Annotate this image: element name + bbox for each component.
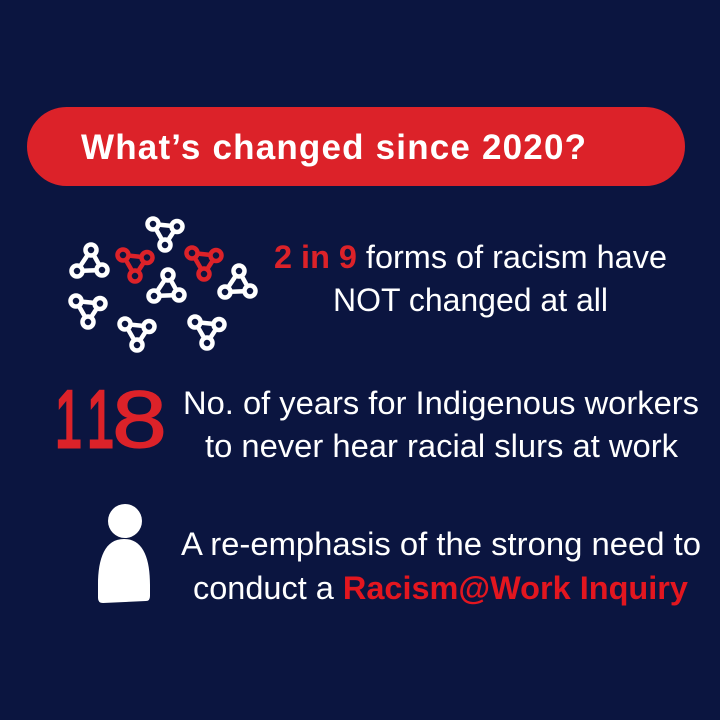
text: years for Indigenous workers: [183, 385, 699, 464]
number: 118: 1: [87, 375, 114, 465]
heading banner: [27, 107, 685, 186]
number: 118: 1: [55, 375, 82, 465]
text: re-emphasis: A re-emphasis of the strong need to: [181, 526, 701, 562]
text: years for Indigenous workers: No. of years for Indigenous workers: [183, 385, 699, 421]
number: 118: [55, 374, 167, 465]
text: re-emphasis: [181, 526, 701, 606]
heading: What’s changed since 2020?: [81, 128, 586, 167]
icon: person: [98, 504, 150, 603]
text: re-emphasis: conduct a Racism@Work Inquiry: [193, 570, 688, 606]
text: years for Indigenous workers: to never hear racial slurs at work: [205, 428, 679, 464]
number: 118: 8: [112, 374, 167, 465]
text: forms of racism: 2 in 9 forms of racism have: [274, 239, 667, 275]
text: forms of racism: NOT changed at all: [333, 282, 608, 318]
text: forms of racism: [274, 239, 667, 318]
icon: network cluster: [70, 218, 256, 350]
